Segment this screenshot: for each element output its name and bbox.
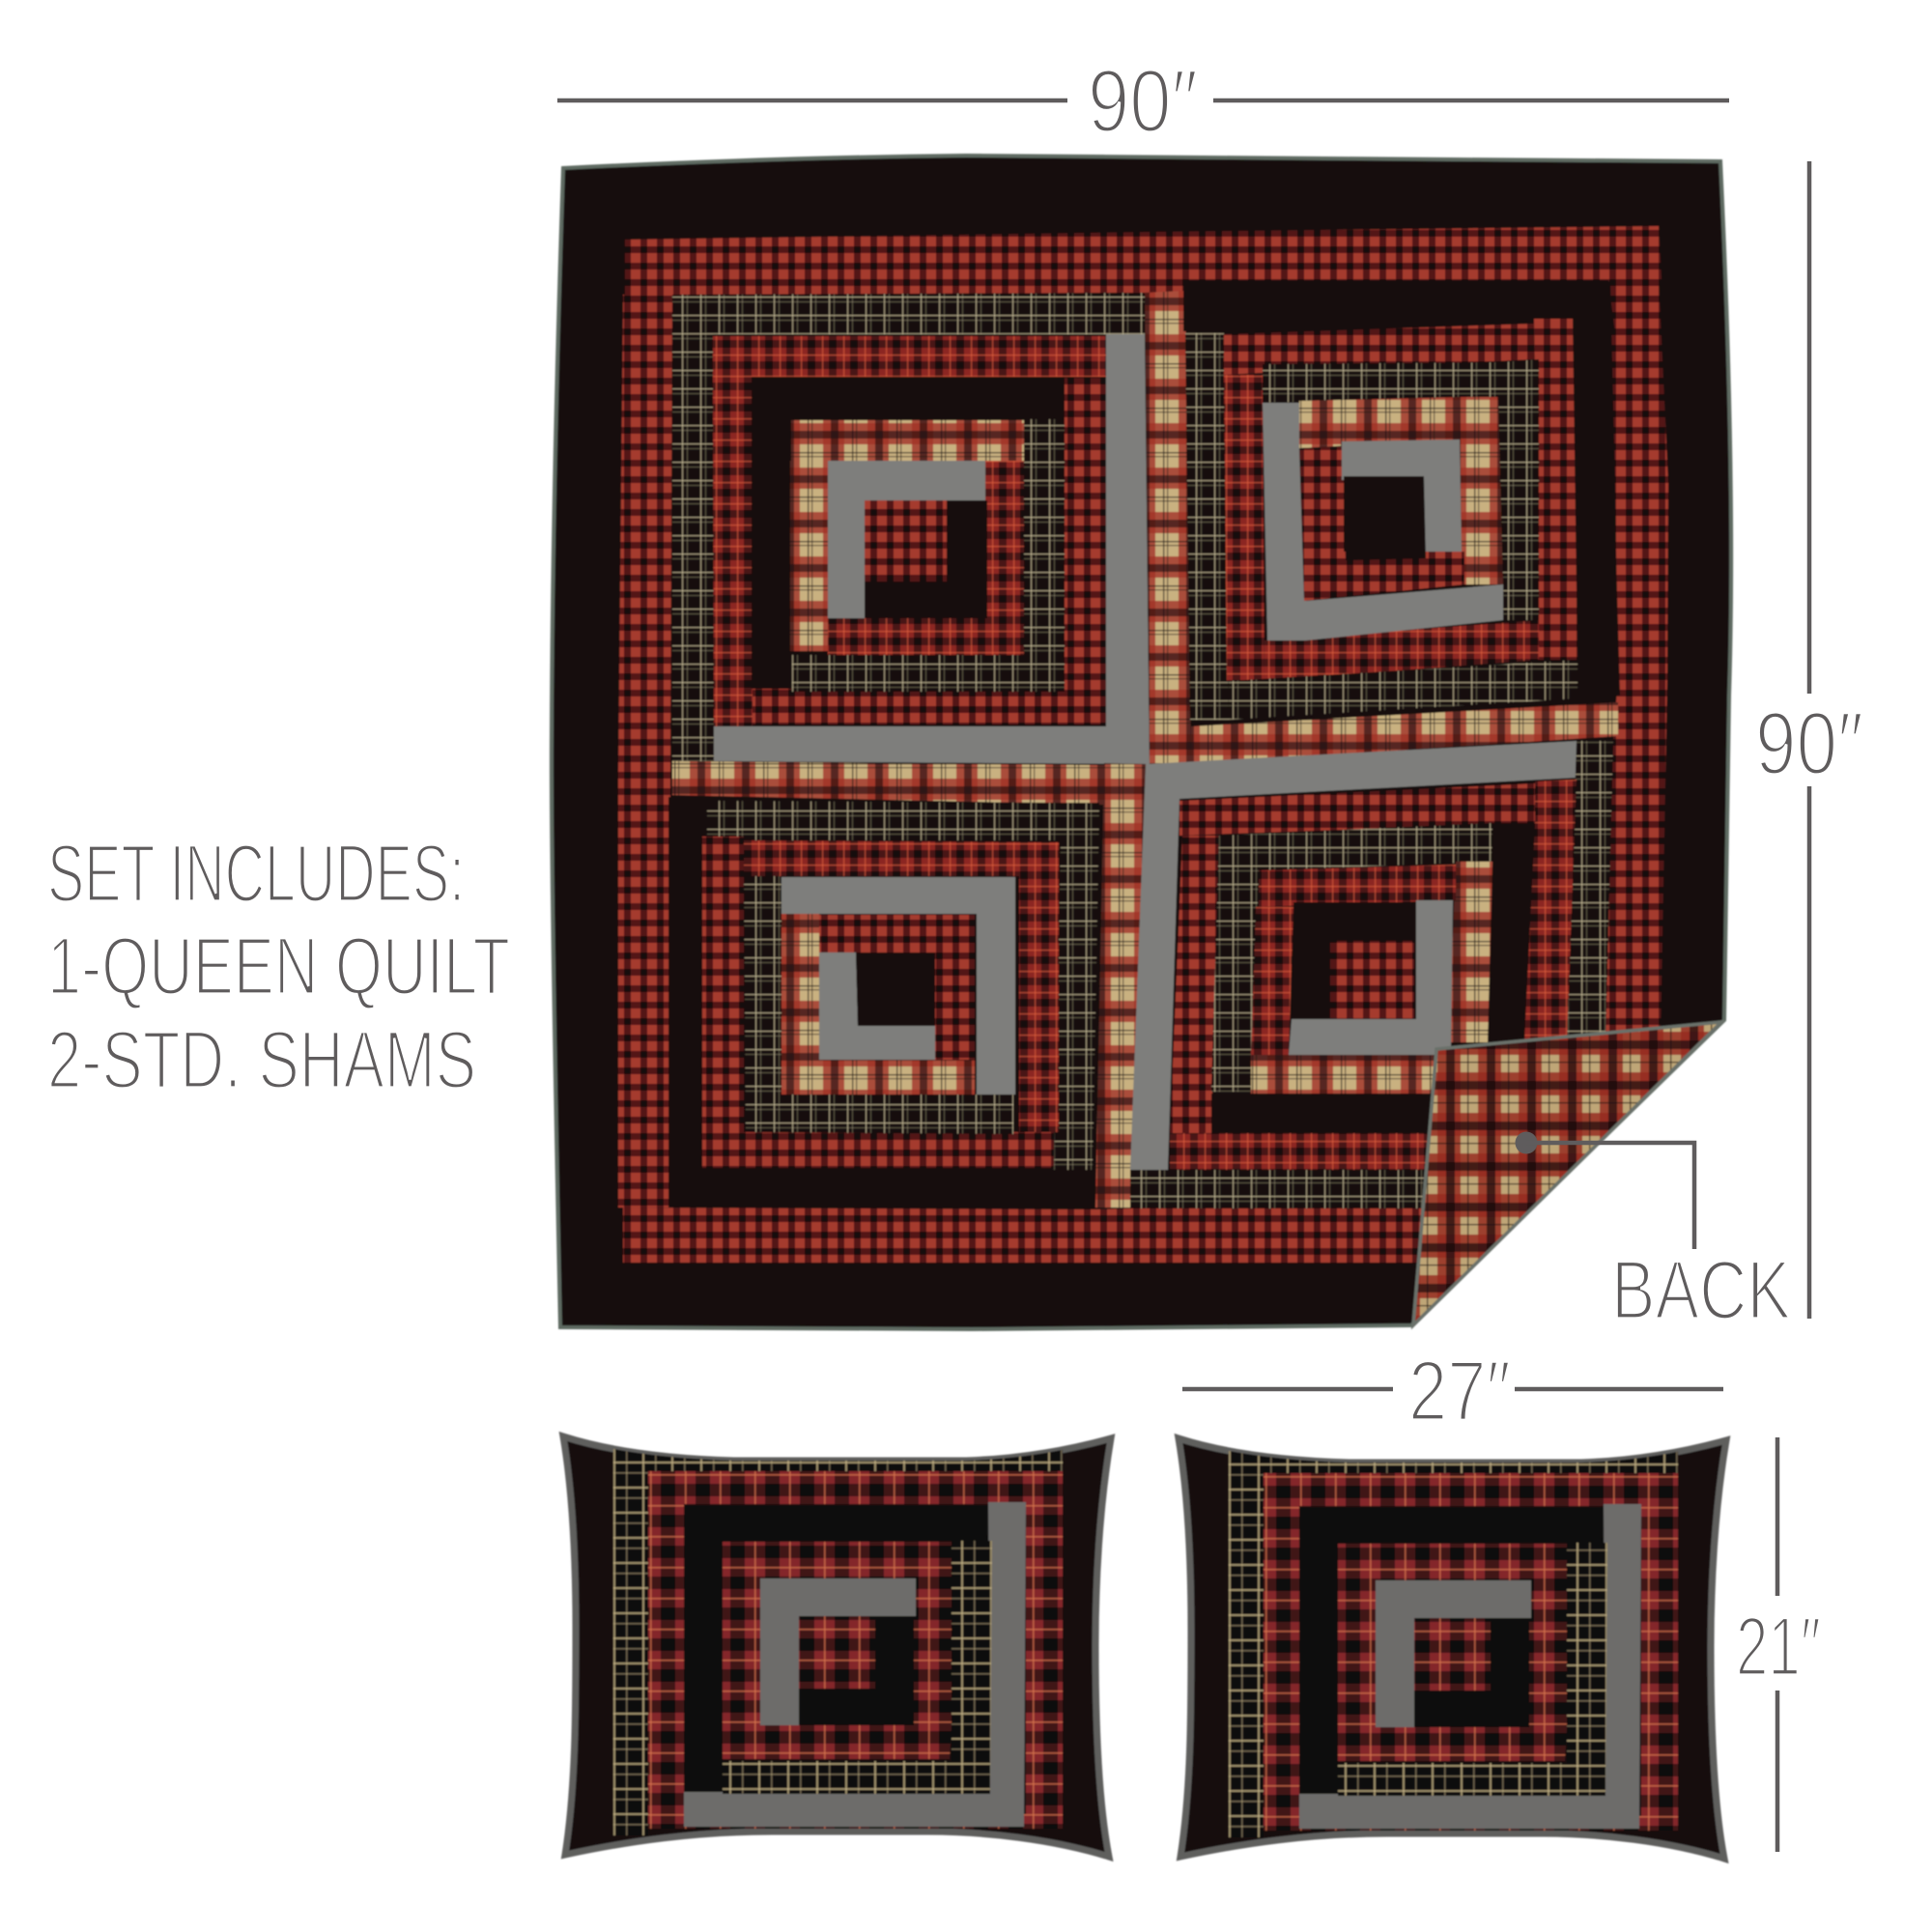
quilt xyxy=(552,156,1731,1329)
block: top right log cabin xyxy=(1183,280,1620,720)
center sashing: right horizontal tan plaid xyxy=(1191,702,1618,764)
block: bottom right log cabin xyxy=(1130,741,1613,1208)
text block: set includes: SET INCLUDES: xyxy=(47,828,465,919)
text block: set includes xyxy=(47,828,510,1105)
block: bottom left log cabin xyxy=(668,761,1104,1208)
callout: back leader line and label: BACK xyxy=(1611,1244,1791,1337)
sham width dimension: 27 inches: 27″ xyxy=(1408,1343,1511,1438)
top width dimension: 90 inches: 90″ xyxy=(1088,52,1198,151)
center square: top left xyxy=(865,500,947,582)
center square: top right xyxy=(1344,476,1426,560)
text block: set includes: 1-QUEEN QUILT xyxy=(47,921,510,1011)
outer red check border xyxy=(618,226,1668,1263)
block: top left log cabin xyxy=(672,293,1150,764)
center sashing: upper vertical tan plaid xyxy=(1145,291,1191,764)
pillow sham right xyxy=(1179,1438,1726,1859)
right height dimension: 90 inches: 90″ xyxy=(1755,695,1863,793)
center square: bottom left xyxy=(856,952,935,1026)
sham height dimension: 21 inches: 21″ xyxy=(1736,1601,1821,1693)
center square: bottom right xyxy=(1330,941,1414,1019)
quilt silhouette with black outer border xyxy=(552,156,1731,1329)
text block: set includes: 2-STD. SHAMS xyxy=(47,1014,476,1105)
pillow sham left xyxy=(563,1436,1111,1857)
folded corner showing quilt back xyxy=(1413,1022,1721,1325)
center sashing: lower vertical tan plaid xyxy=(1095,763,1146,1208)
callout: back leader line and label xyxy=(1515,1132,1791,1337)
